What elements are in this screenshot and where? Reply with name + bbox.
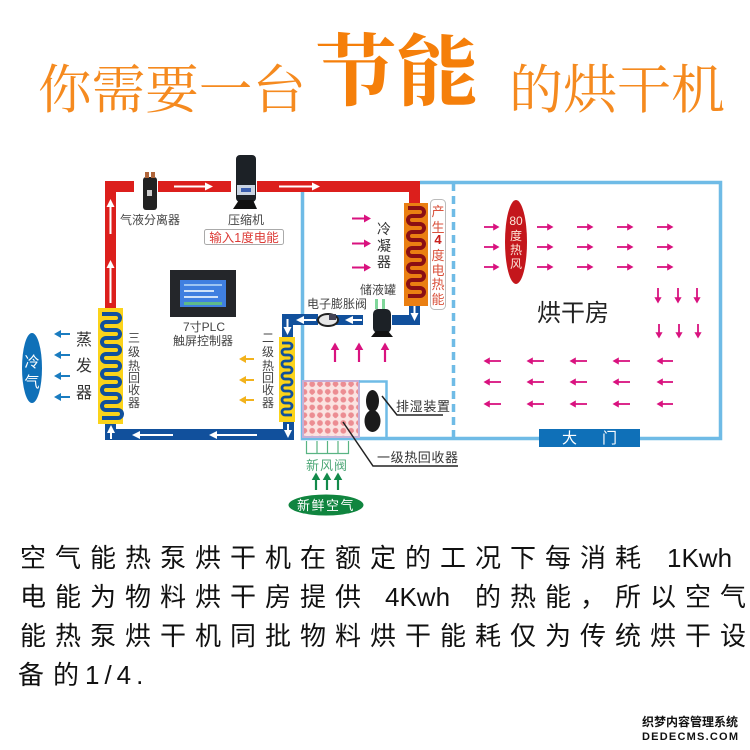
- description paragraph: [18, 543, 750, 690]
- condenser coil: [404, 203, 428, 306]
- second-stage recovery label: 级: [262, 345, 274, 359]
- cold air ellipse: 冷: [24, 354, 40, 371]
- description paragraph: 1/4.: [85, 660, 148, 690]
- drying room downward arrows: [658, 288, 698, 334]
- fresh air ellipse: 新鲜空气: [297, 498, 355, 513]
- compressor: [228, 155, 264, 227]
- 80 degree hot air ellipse: 80: [509, 214, 523, 228]
- cold air ellipse: [22, 333, 42, 403]
- description paragraph: 4Kwh: [385, 582, 450, 612]
- description paragraph: 空气能热泵烘干机在额定的工况下每消耗: [20, 543, 650, 573]
- description paragraph: 1Kwh: [667, 543, 732, 573]
- description paragraph: 能热泵烘干机同批物料烘干能耗仅为传统烘干设: [20, 621, 750, 651]
- white flow arrows on red pipe: [110, 186, 314, 303]
- dehumidifier box and fan: [359, 382, 386, 438]
- label: generates 4 kWh heat: 热: [431, 277, 445, 292]
- title: 的烘干机: [509, 62, 725, 120]
- description paragraph: 备的: [18, 660, 88, 690]
- 80 degree hot air ellipse: 风: [510, 257, 522, 271]
- title: 你需要一台: [38, 62, 306, 120]
- dehumidifier callout: [382, 396, 450, 415]
- fresh air ellipse: [288, 494, 364, 516]
- drying room label: 烘干房: [537, 300, 609, 327]
- condenser label: 冷: [377, 221, 391, 237]
- liquid receiver: 储液罐: [360, 282, 396, 297]
- watermark: 织梦内容管理系统: [642, 714, 738, 729]
- upward pink arrows: [335, 348, 385, 362]
- label: generates 4 kWh heat: 电: [431, 263, 445, 278]
- description paragraph: 电能为物料烘干房提供: [20, 582, 370, 612]
- first-stage recovery callout: 一级热回收器: [377, 450, 458, 465]
- cold air ellipse: 气: [24, 374, 40, 391]
- evaporator label: 器: [76, 384, 92, 402]
- third-stage recovery label: 热: [128, 359, 140, 373]
- second-stage recovery label: 热: [262, 359, 274, 373]
- evaporator label: 蒸: [76, 331, 92, 349]
- label: input 1 kWh: 输入1度电能: [209, 230, 279, 245]
- label: generates 4 kWh heat: 能: [431, 292, 445, 307]
- condenser label: [377, 221, 391, 270]
- third-stage recovery label: 三: [128, 331, 140, 345]
- gate: 大门: [562, 430, 642, 447]
- PLC controller: 触屏控制器: [173, 334, 233, 348]
- first-stage heat recovery mesh: [303, 381, 359, 437]
- PLC controller: [170, 270, 236, 348]
- cold air arrows: [59, 334, 70, 397]
- compressor: 压缩机: [228, 212, 264, 227]
- 80 degree hot air ellipse: [505, 200, 527, 284]
- fresh air valve: [306, 441, 348, 473]
- condenser label: 器: [377, 254, 391, 270]
- drying room frame: [302, 182, 720, 438]
- electronic expansion valve: 电子膨胀阀: [307, 297, 367, 311]
- third-stage recovery label: 器: [128, 396, 140, 410]
- second-stage recovery label: 器: [262, 396, 274, 410]
- third-stage recovery label: 级: [128, 345, 140, 359]
- label: generates 4 kWh heat: 产: [431, 204, 445, 219]
- drying room leftward arrows: [488, 361, 673, 404]
- label: generates 4 kWh heat: 4: [434, 232, 442, 247]
- second-stage recovery label: 回: [262, 371, 274, 385]
- watermark: DEDECMS.COM: [642, 731, 738, 743]
- red high-pressure pipe: [105, 181, 420, 309]
- electronic expansion valve: [307, 297, 367, 326]
- third-stage recovery label: 回: [128, 371, 140, 385]
- second-stage recovery label: 二: [262, 331, 274, 345]
- watermark: [642, 714, 738, 743]
- title: [38, 29, 725, 120]
- green air arrows: [316, 478, 338, 490]
- gas-liquid separator: [120, 172, 180, 227]
- blue low-pressure pipe: [105, 304, 420, 440]
- evaporator label: 发: [76, 357, 92, 375]
- fresh air valve: 新风阀: [306, 458, 348, 473]
- second-stage recovery label: 收: [262, 383, 274, 397]
- white flow arrows on blue pipe: [111, 306, 414, 439]
- gas-liquid separator: 气液分离器: [120, 212, 180, 227]
- dehumidifier callout: 排湿装置: [396, 399, 450, 414]
- evaporator label: [76, 331, 92, 402]
- PLC controller: 7寸PLC: [183, 320, 225, 334]
- third-stage recovery label: [128, 331, 140, 410]
- label: generates 4 kWh heat: 生: [431, 220, 445, 235]
- second-stage recovery label: [262, 331, 274, 410]
- second-stage heat recovery coil: [279, 337, 295, 422]
- evaporator coil: [98, 308, 123, 424]
- drying room rightward arrows: [484, 227, 669, 267]
- label: generates 4 kWh heat: 度: [431, 248, 445, 263]
- yellow arrows: [244, 359, 254, 400]
- label: generates 4 kWh heat: [430, 200, 446, 310]
- condenser arrows: [352, 218, 366, 268]
- 80 degree hot air ellipse: 度: [510, 228, 522, 243]
- title: 节能: [315, 29, 478, 116]
- description paragraph: 的热能，所以空气: [475, 582, 750, 612]
- 80 degree hot air ellipse: 热: [510, 243, 522, 257]
- third-stage recovery label: 收: [128, 383, 140, 397]
- first-stage recovery callout: [343, 422, 458, 466]
- liquid receiver: [360, 282, 396, 337]
- condenser label: 凝: [377, 238, 391, 254]
